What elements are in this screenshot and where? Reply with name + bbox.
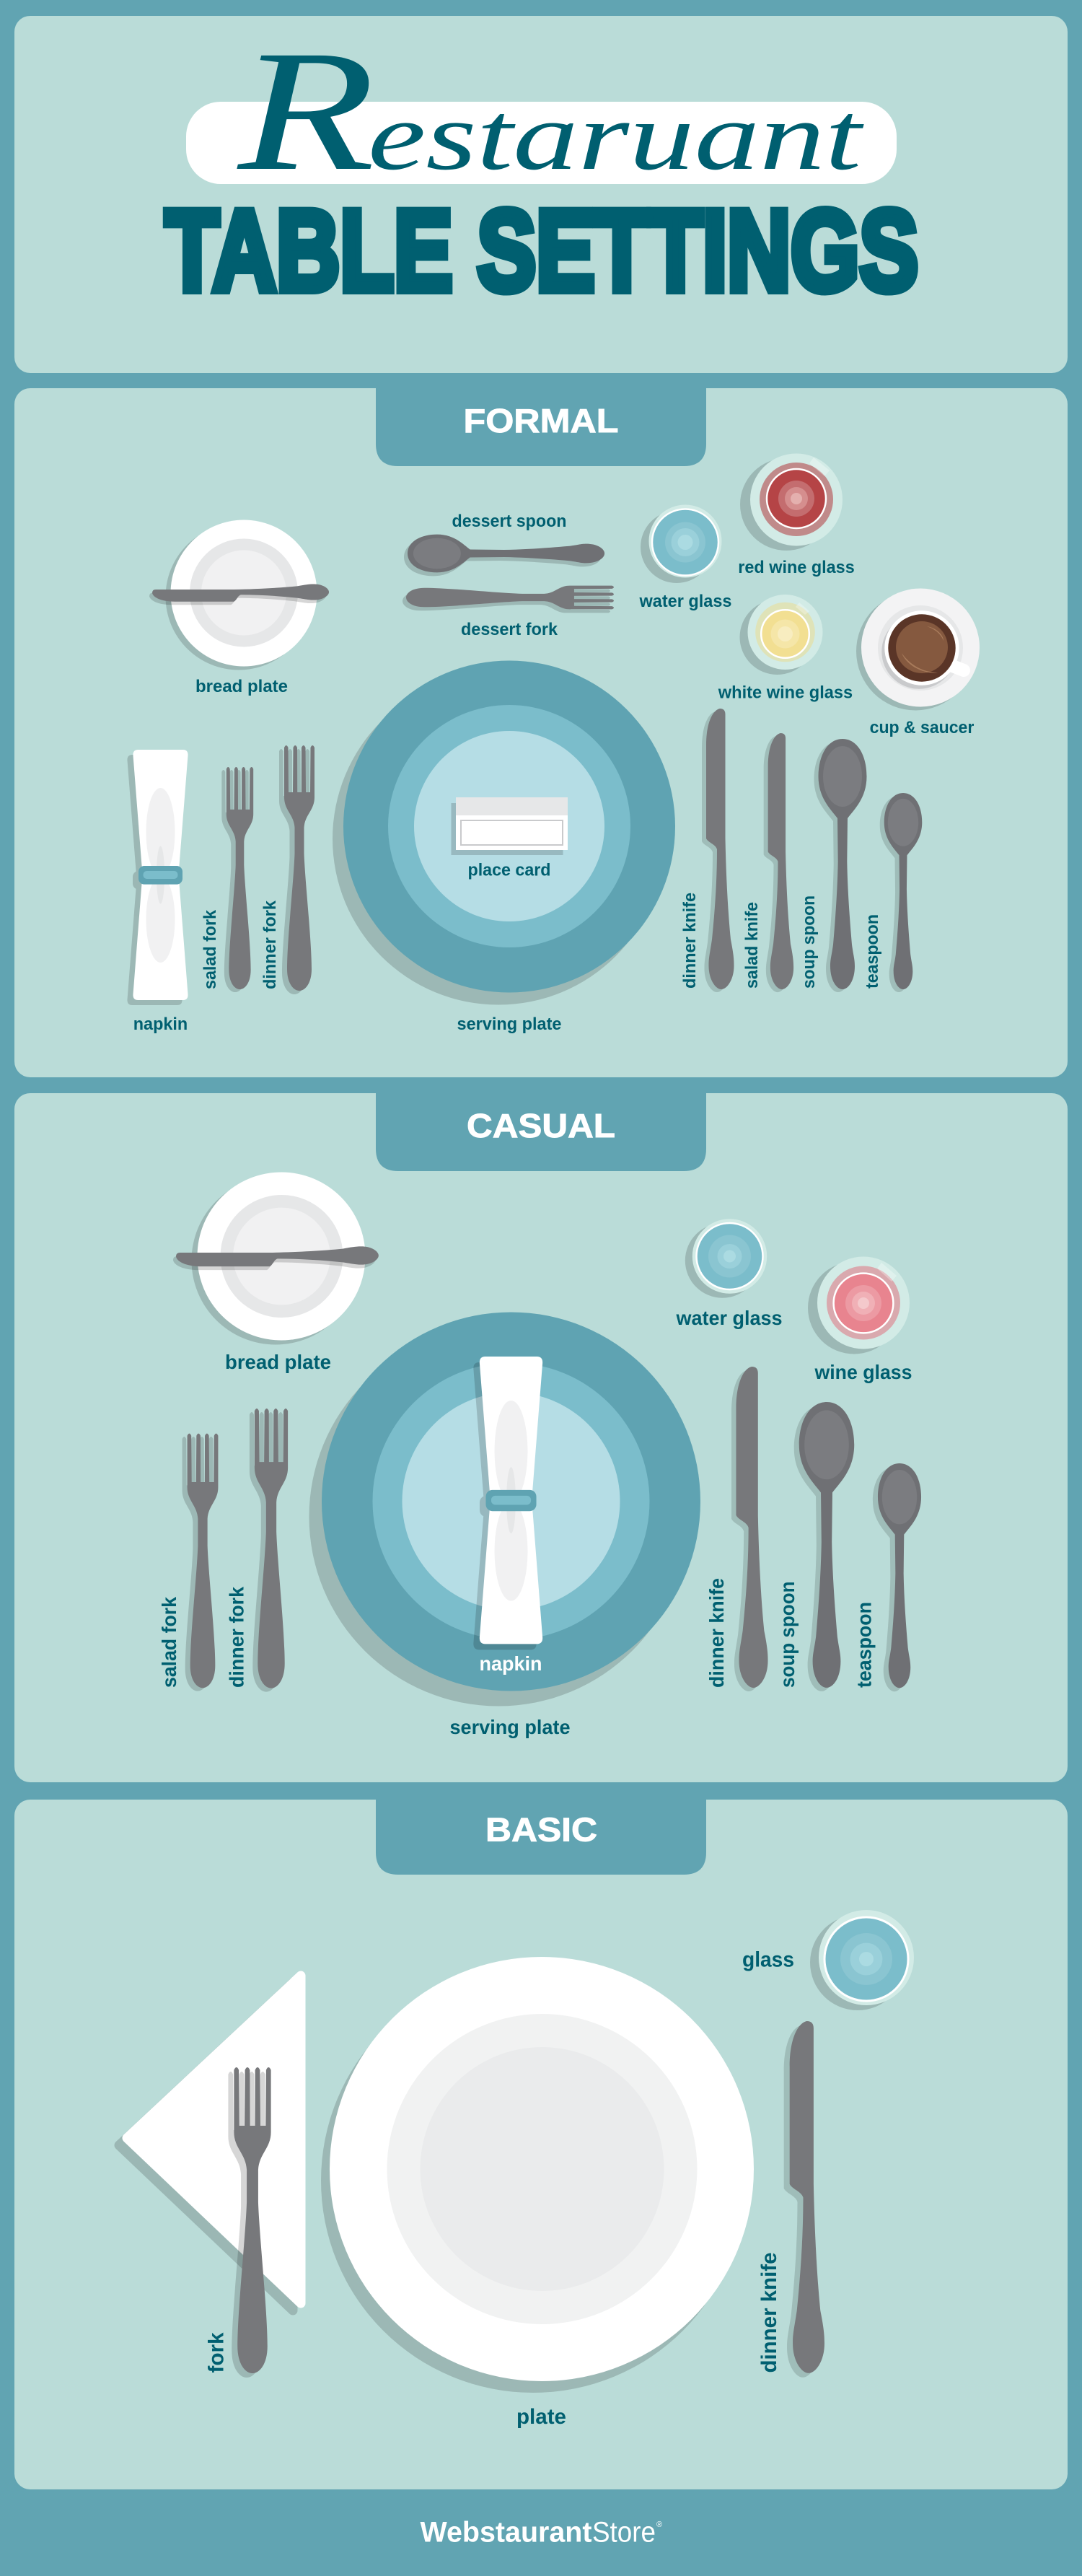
label: white wine glass: white wine glass [718,683,853,703]
label: soup spoon: soup spoon [776,1582,799,1688]
label: napkin: napkin [133,1015,188,1034]
water glass [685,1219,767,1298]
teaspoon [880,793,922,992]
formal heading tab: FORMAL [463,402,619,439]
formal heading tab [376,388,706,466]
label: bread plate: bread plate [195,677,288,696]
napkin [473,1357,542,1650]
label: soup spoon: soup spoon [799,895,819,989]
glass [810,1910,914,2010]
label: teaspoon: teaspoon [863,914,882,989]
label: dessert spoon: dessert spoon [452,512,567,531]
panel: formal [14,388,1068,1077]
panel: title [14,14,1068,373]
label: salad fork: salad fork [201,910,220,989]
label: water glass: water glass [639,592,731,611]
bread plate [149,520,329,670]
cup and saucer [856,589,980,710]
dessert spoon [404,535,604,576]
label: dinner fork: dinner fork [225,1587,248,1688]
dinner knife [731,1367,768,1691]
casual heading tab [376,1093,706,1171]
napkin triangle [119,1976,301,2310]
plate [321,1957,754,2393]
label: bread plate: bread plate [225,1351,331,1373]
label: dinner knife: dinner knife [680,893,700,989]
casual heading tab: CASUAL [467,1107,615,1144]
label: fork: fork [205,2332,228,2373]
salad knife [764,733,793,992]
label: plate: plate [516,2405,566,2429]
label: dinner knife: dinner knife [705,1578,728,1688]
dinner fork [250,1409,288,1692]
serving plate [309,1312,700,1706]
dinner knife [702,709,734,992]
title pill [186,102,897,184]
label: dessert fork: dessert fork [461,620,558,639]
label: napkin: napkin [479,1652,542,1675]
water glass [641,505,721,583]
title: Restaruant script: R [236,14,375,206]
label: salad knife: salad knife [742,902,762,989]
logo: WebstaurantStore: Store [592,2517,656,2549]
napkin [127,750,188,1005]
salad fork [182,1434,218,1691]
place card [452,797,568,855]
label: red wine glass: red wine glass [738,558,855,577]
panel: basic [14,1782,1068,2489]
logo: WebstaurantStore: ® [656,2520,662,2529]
basic heading tab [376,1782,706,1875]
title: Restaruant script [236,14,865,206]
dinner fork [279,745,315,994]
label: glass: glass [742,1948,794,1971]
label: serving plate: serving plate [457,1015,561,1034]
white wine glass [740,595,822,675]
soup spoon [794,1402,854,1691]
teaspoon [873,1463,921,1691]
label: cup and saucer: cup & saucer [870,718,975,737]
soup spoon [814,739,867,992]
label: place card: place card [467,860,551,880]
dessert fork [403,586,614,613]
label: dinner fork: dinner fork [260,901,280,989]
label: water glass: water glass [676,1307,782,1329]
label: dinner knife: dinner knife [757,2253,781,2373]
title: Restaruant script: estaruant [368,83,865,190]
dinner knife [784,2021,824,2378]
red wine glass [740,453,843,551]
wine glass [808,1257,910,1354]
fork [228,2067,271,2378]
salad fork [221,767,253,992]
logo: WebstaurantStore: Webstaurant [420,2517,591,2549]
panel: casual [14,1093,1068,1782]
bread plate [173,1172,379,1345]
label: teaspoon: teaspoon [853,1602,876,1688]
label: serving plate: serving plate [450,1716,570,1738]
label: salad fork: salad fork [158,1597,180,1688]
serving plate [333,661,675,1004]
label: wine glass: wine glass [814,1361,912,1383]
basic heading tab: BASIC [485,1811,597,1849]
